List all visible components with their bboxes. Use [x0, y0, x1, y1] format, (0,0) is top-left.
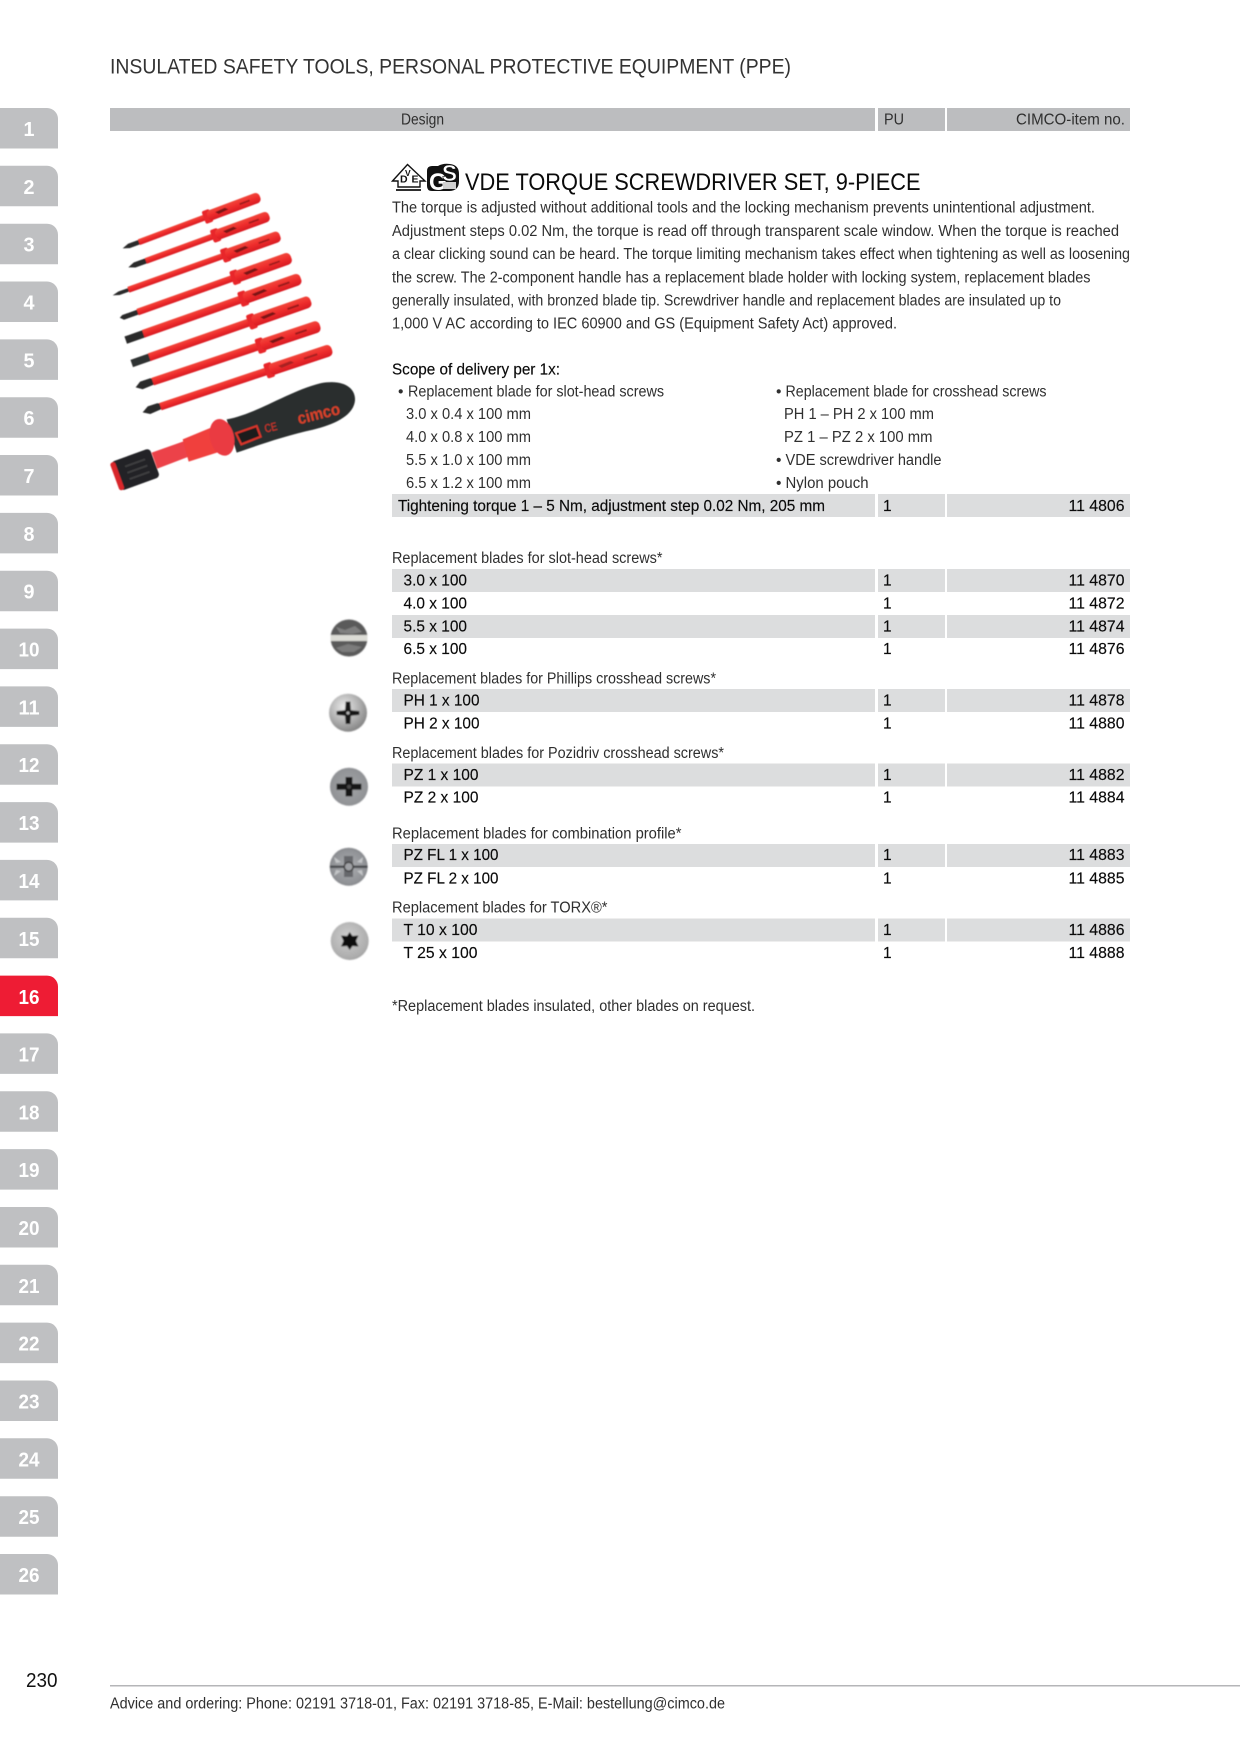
row PZ 2: 1 [883, 790, 892, 807]
heading: Replacement blades for slot-head screws* [392, 550, 662, 567]
row 3.0 x 100: 3.0 x 100 [404, 572, 467, 590]
tab 18: 18 [18, 1101, 40, 1124]
section: TORX blades [392, 899, 1130, 962]
row PZ 1: PZ 1 x 100 [404, 767, 479, 784]
section: Pozidriv blades [392, 745, 1130, 807]
scope of delivery: • [776, 452, 781, 469]
scope of delivery: 3.0 x 0.4 x 100 mm [406, 406, 531, 423]
scope of delivery: • [398, 384, 403, 401]
row 5.5 x 100: 11 4874 [1068, 618, 1125, 636]
heading: Replacement blades for combination profile* [392, 825, 682, 842]
icon: VDE mark [392, 164, 425, 190]
product description: Adjustment steps 0.02 Nm, the torque is read off through transparent scale window. When the torque is reached [392, 223, 1119, 240]
product description: generally insulated, with bronzed blade tip. Screwdriver handle and replacement blades are insulated up to [392, 293, 1061, 310]
row 6.5 x 100 [404, 641, 1124, 658]
product description [392, 200, 1130, 333]
row PZ FL 1: PZ FL 1 x 100 [404, 847, 499, 864]
product description: the screw. The 2-component handle has a replacement blade holder with locking system, replacement blades [392, 270, 1091, 287]
tab 2 [0, 166, 58, 206]
row PZ FL 1: 1 [883, 847, 892, 864]
tab 17: 17 [18, 1043, 40, 1066]
chapter tabs [0, 108, 58, 1594]
tab 6: 6 [24, 407, 34, 430]
icon: GS mark: G [429, 169, 447, 196]
blade 2 [126, 210, 271, 274]
tab 25: 25 [18, 1506, 40, 1529]
row 3.0 x 100: 11 4870 [1068, 572, 1125, 590]
product description: a clear clicking sound can be heard. The torque limiting mechanism takes effect when tightening as well as loosening [392, 246, 1130, 263]
tab 15 [0, 918, 58, 958]
knob [109, 448, 160, 491]
row PZ FL 2: 11 4885 [1068, 870, 1124, 887]
icon: GS mark [427, 160, 459, 196]
tab 2: 2 [24, 176, 34, 199]
section: Phillips blades [392, 670, 1130, 732]
window [236, 426, 261, 444]
blade 4 [118, 250, 294, 325]
row 5.5 x 100: 5.5 x 100 [404, 618, 467, 636]
tab 10: 10 [18, 639, 40, 662]
set row: tightening torque [392, 494, 1130, 517]
scope of delivery: • [776, 475, 781, 492]
row 6.5 x 100: 1 [883, 641, 892, 658]
tab 22: 22 [18, 1333, 40, 1356]
tab 15: 15 [18, 928, 40, 951]
tab 5 [0, 339, 58, 380]
scope of delivery: Replacement blade for crosshead screws [786, 384, 1047, 401]
icon: VDE mark: V [405, 168, 411, 178]
tab 8: 8 [24, 523, 34, 546]
row 5.5 x 100: 1 [883, 618, 892, 636]
footnote: *Replacement blades insulated, other blades on request. [392, 998, 755, 1015]
row PZ FL 1 [392, 844, 1130, 867]
blade 7 [133, 318, 322, 395]
icon: VDE mark: D [400, 174, 408, 186]
row PZ FL 2: PZ FL 2 x 100 [404, 870, 499, 887]
tab 26 [0, 1554, 58, 1594]
row PZ 2: PZ 2 x 100 [404, 790, 479, 807]
tab 20: 20 [18, 1217, 40, 1240]
row T 25: T 25 x 100 [404, 945, 478, 962]
row T 25: 11 4888 [1068, 945, 1124, 962]
tab 7 [0, 455, 58, 496]
row 3.0 x 100: 1 [883, 572, 892, 590]
tab 21 [0, 1265, 58, 1305]
tab 3: 3 [24, 234, 34, 257]
tab 14 [0, 860, 58, 900]
section: combination profile blades [392, 825, 1130, 887]
product heading with approval marks [392, 160, 920, 196]
CE mark: CE [263, 421, 279, 436]
page title: INSULATED SAFETY TOOLS, PERSONAL PROTECTIVE EQUIPMENT (PPE) [110, 56, 791, 78]
row 5.5 x 100 [392, 615, 1130, 638]
tab 22 [0, 1323, 58, 1363]
tab 26: 26 [18, 1564, 40, 1587]
row 6.5 x 100: 6.5 x 100 [404, 641, 467, 658]
row T 25: 1 [883, 945, 892, 962]
tab 16 active: 16 [18, 986, 40, 1009]
tab 1 [0, 108, 58, 148]
brand mark: cimco [295, 399, 342, 428]
scope of delivery: Replacement blade for slot-head screws [408, 384, 664, 401]
heading: Replacement blades for Phillips crosshead screws* [392, 670, 716, 687]
black grip [227, 382, 355, 453]
tab 7: 7 [24, 465, 34, 488]
row T 10: 1 [883, 922, 892, 939]
row T 10: T 10 x 100 [404, 922, 478, 939]
scope of delivery: PZ 1 – PZ 2 x 100 mm [784, 429, 932, 446]
row PZ FL 1: 11 4883 [1068, 847, 1124, 864]
scope of delivery: Scope of delivery per 1x: [392, 362, 560, 378]
table header bar [110, 108, 1130, 131]
tab 1: 1 [24, 118, 34, 141]
row PH 1 [392, 689, 1130, 712]
row T 10: 11 4886 [1068, 922, 1124, 939]
scope of delivery: VDE screwdriver handle [786, 452, 942, 469]
scope of delivery: 6.5 x 1.2 x 100 mm [406, 475, 531, 492]
scope of delivery: PH 1 – PH 2 x 100 mm [784, 406, 934, 423]
set row: tightening torque: 1 [883, 498, 892, 515]
row 3.0 x 100 [392, 569, 1130, 592]
row PH 2: 1 [883, 715, 892, 732]
product title: VDE TORQUE SCREWDRIVER SET, 9-PIECE [465, 169, 920, 196]
row PH 1: 1 [883, 693, 892, 710]
tab 11: 11 [18, 696, 40, 719]
tab 12: 12 [18, 754, 40, 777]
tab 20 [0, 1207, 58, 1248]
heading: Replacement blades for Pozidriv crosshead screws* [392, 745, 724, 762]
tab 13: 13 [18, 812, 40, 835]
handle shaft [152, 426, 220, 469]
heading: Replacement blades for TORX®* [392, 899, 608, 916]
tab 11 [0, 686, 58, 727]
scope of delivery: Nylon pouch [786, 475, 868, 492]
row T 10 [392, 918, 1130, 942]
section: slot-head blades [392, 550, 1130, 658]
row PZ FL 2 [404, 870, 1124, 887]
row PH 1: 11 4878 [1068, 693, 1124, 710]
tab 4: 4 [24, 292, 35, 314]
product description: The torque is adjusted without additional tools and the locking mechanism prevents unintentional adjustment. [392, 200, 1095, 217]
table header bar: CIMCO-item no. [1016, 112, 1125, 128]
row PZ 1: 11 4882 [1068, 767, 1124, 784]
blade 1 [120, 190, 262, 255]
row PZ 2 [404, 790, 1125, 807]
row PH 2: PH 2 x 100 [404, 715, 480, 732]
row PZ 1 [392, 764, 1130, 786]
translucent collar [206, 416, 238, 458]
tab 23: 23 [18, 1390, 40, 1414]
tab 12 [0, 744, 58, 785]
tab 8 [0, 513, 58, 553]
row 4.0 x 100 [404, 595, 1124, 612]
blade 3 [110, 229, 282, 302]
tab 5: 5 [24, 349, 34, 372]
tab 3 [0, 224, 58, 264]
tab 9: 9 [24, 581, 34, 604]
icon: Phillips screw head [329, 694, 367, 732]
tab 19: 19 [18, 1159, 40, 1182]
icon: GS mark: S [442, 160, 457, 186]
set row: tightening torque: Tightening torque 1 – 5 Nm, adjustment step 0.02 Nm, 205 mm [398, 498, 825, 515]
product photo: screwdriver set [109, 190, 355, 491]
tab 19 [0, 1149, 58, 1190]
icon: slot screw head [330, 620, 368, 656]
icon: TORX screw head [331, 922, 369, 960]
row PZ 1: 1 [883, 767, 892, 784]
row PZ FL 2: 1 [883, 870, 892, 887]
row PH 2: 11 4880 [1068, 715, 1125, 732]
row T 25 [404, 945, 1124, 962]
row 6.5 x 100: 11 4876 [1068, 641, 1124, 658]
blade 6 [129, 294, 313, 371]
table header bar: PU [884, 112, 904, 128]
footer contact line: Advice and ordering: Phone: 02191 3718-01, Fax: 02191 3718-85, E-Mail: bestellung@cimco.de [110, 1696, 725, 1712]
tab 9 [0, 571, 58, 611]
scope of delivery: 4.0 x 0.8 x 100 mm [406, 429, 531, 446]
blade 5 [123, 271, 303, 347]
tab 24: 24 [18, 1448, 40, 1471]
table header bar: Design [401, 112, 444, 128]
scope of delivery: • [776, 384, 781, 401]
scope of delivery: 5.5 x 1.0 x 100 mm [406, 452, 531, 469]
tab 13 [0, 802, 58, 843]
tab 21: 21 [18, 1275, 40, 1298]
tab 10 [0, 629, 58, 669]
tab 17 [0, 1033, 58, 1074]
row PH 1: PH 1 x 100 [404, 693, 480, 710]
tab 25 [0, 1496, 58, 1537]
tab 23 [0, 1380, 58, 1421]
scope of delivery [392, 362, 1047, 492]
row 4.0 x 100: 11 4872 [1068, 595, 1124, 612]
page number: 230 [26, 1670, 58, 1692]
row PH 2 [404, 715, 1125, 732]
row PZ 2: 11 4884 [1068, 790, 1125, 807]
icon: combination screw head [330, 848, 368, 886]
tab 6 [0, 397, 58, 438]
tab 4 [0, 282, 58, 322]
set row: tightening torque: 11 4806 [1068, 498, 1124, 515]
icon: Pozidriv screw head [330, 768, 368, 806]
product description: 1,000 V AC according to IEC 60900 and GS (Equipment Safety Act) approved. [392, 316, 897, 333]
tab 18 [0, 1091, 58, 1132]
tab 14: 14 [18, 870, 40, 893]
tab 16 active [0, 976, 58, 1016]
row 4.0 x 100: 4.0 x 100 [404, 595, 467, 612]
icon: VDE mark: E [412, 174, 419, 186]
tab 24 [0, 1438, 58, 1479]
blade 8 [140, 342, 334, 420]
row 4.0 x 100: 1 [883, 595, 892, 612]
